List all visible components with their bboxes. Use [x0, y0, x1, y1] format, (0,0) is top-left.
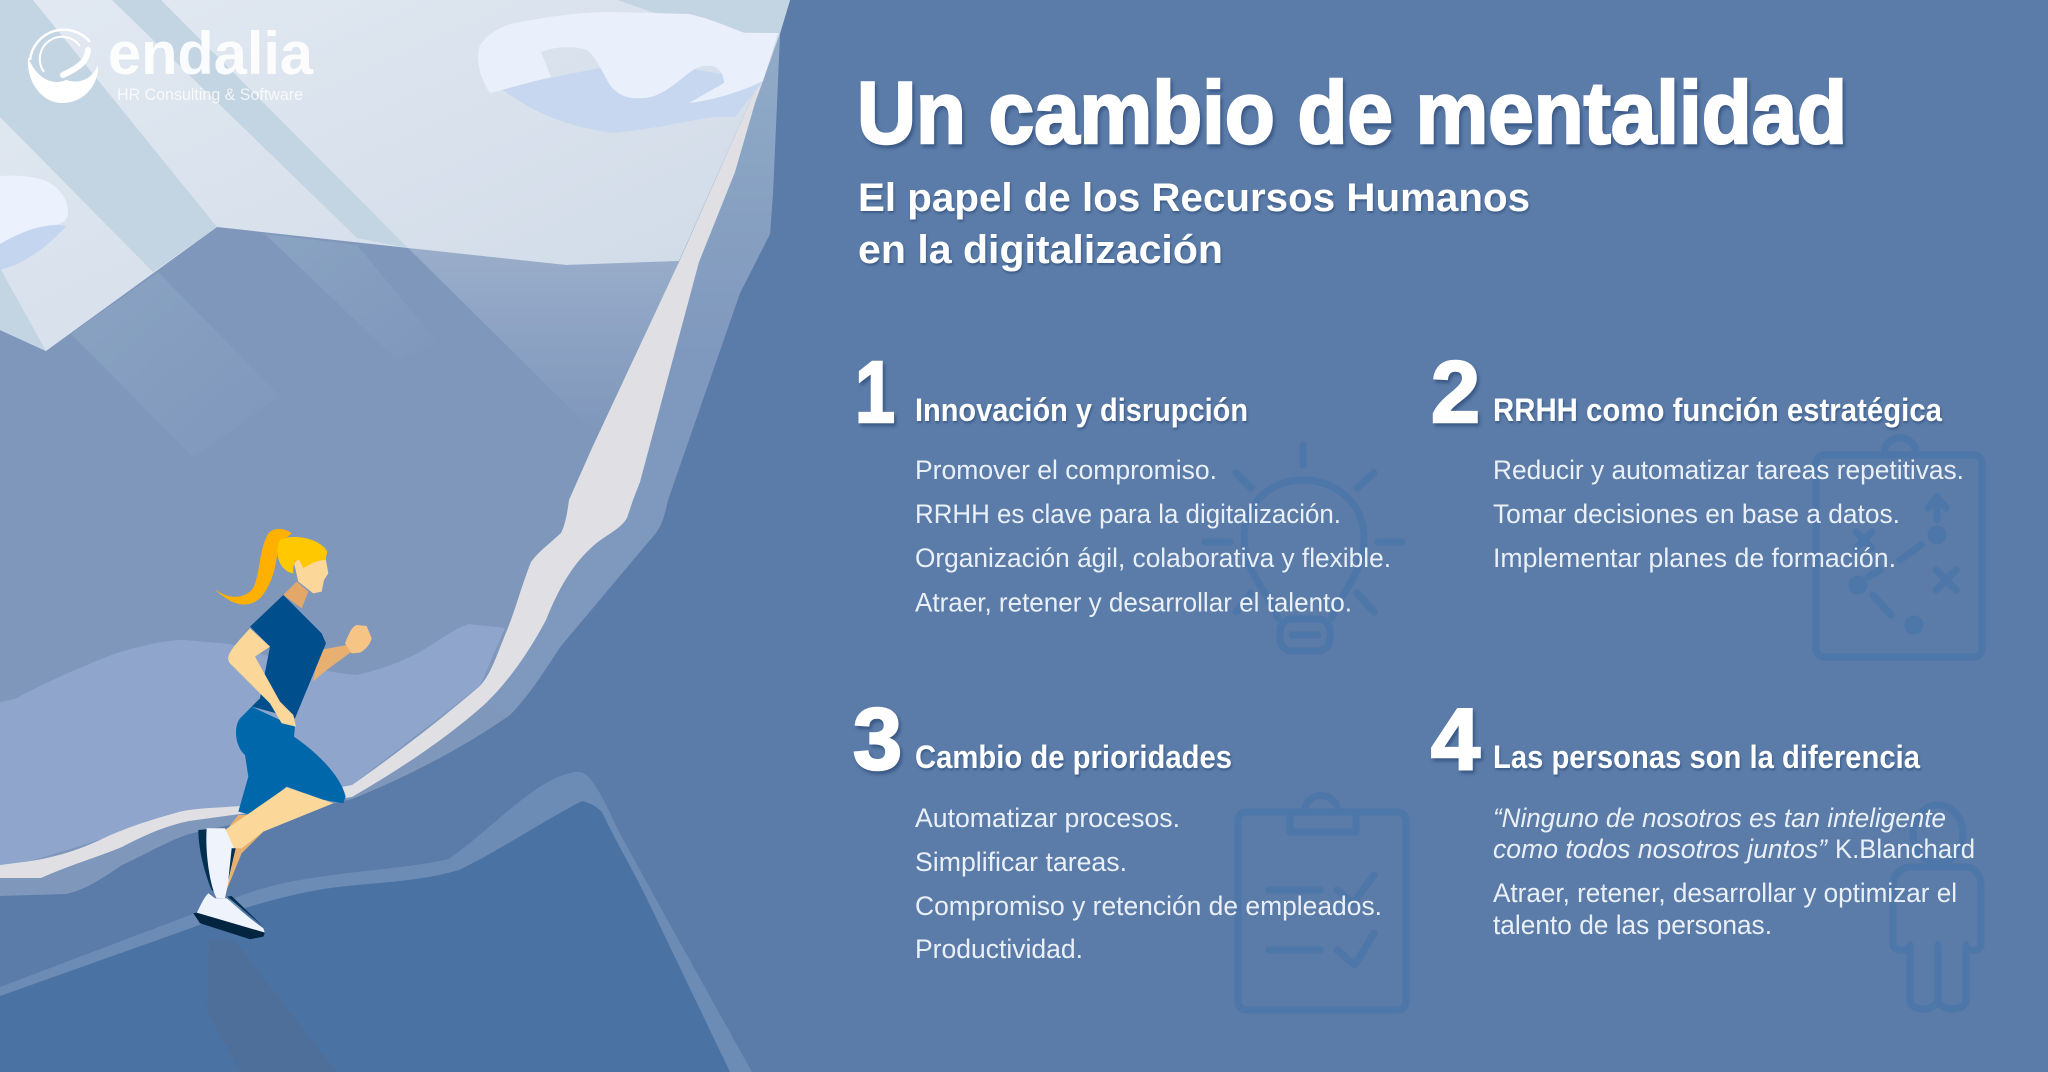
lower shoe	[193, 893, 265, 939]
number 2: 2	[1431, 344, 1480, 441]
number 1: 1	[855, 344, 895, 441]
upper shoe	[198, 828, 236, 900]
mountain side strip	[480, 0, 790, 715]
front arm	[228, 628, 296, 727]
body text 2: Implementar planes de formación.	[1493, 543, 1896, 573]
number 4: 4	[1431, 691, 1480, 788]
subtitle: El papel de los Recursos Humanos	[858, 176, 1530, 220]
body text 3: Simplificar tareas.	[915, 847, 1127, 877]
body text 2	[1493, 455, 1964, 573]
body text 1: Promover el compromiso.	[915, 455, 1217, 485]
runner figure	[193, 529, 372, 939]
sky light rays	[0, 0, 790, 351]
body text 3	[915, 803, 1382, 964]
heading 1: Innovación y disrupción	[915, 392, 1248, 428]
dark foreground hill	[0, 801, 730, 1072]
body text 4: talento de las personas.	[1493, 910, 1772, 940]
section 3: Cambio de prioridades	[853, 691, 1382, 964]
body text 2: Tomar decisiones en base a datos.	[1493, 499, 1900, 529]
heading 3: Cambio de prioridades	[915, 739, 1232, 775]
body text 4	[1493, 803, 1975, 940]
upper mountain	[0, 0, 790, 896]
body text 3: Compromiso y retención de empleados.	[915, 891, 1382, 921]
body text 3: Productividad.	[915, 934, 1083, 964]
ponytail	[215, 529, 292, 605]
runner shadow	[207, 938, 337, 1072]
title: Un cambio de mentalidad	[857, 63, 1847, 162]
body text 4: Atraer, retener, desarrollar y optimizar el	[1493, 878, 1957, 908]
neck	[283, 582, 308, 608]
body text 2: Reducir y automatizar tareas repetitivas.	[1493, 455, 1964, 485]
logo wordmark: endalia	[108, 20, 314, 87]
body text 1	[915, 455, 1391, 618]
icon: person	[1893, 805, 1981, 1009]
face	[293, 557, 328, 593]
heading 2: RRHH como función estratégica	[1493, 392, 1942, 428]
rear arm	[313, 645, 352, 682]
fist	[345, 625, 372, 653]
sky	[0, 0, 790, 351]
body text 3: Automatizar procesos.	[915, 803, 1180, 833]
section 4: Las personas son la diferencia	[1431, 691, 1975, 940]
lavender hill	[0, 624, 505, 865]
subtitle: en la digitalización	[858, 228, 1223, 272]
hair	[277, 537, 327, 573]
front thigh	[223, 787, 333, 848]
icon: light bulb	[1205, 445, 1402, 651]
body text 1: Atraer, retener y desarrollar el talento.	[915, 588, 1352, 618]
body text 1: Organización ágil, colaborativa y flexible.	[915, 543, 1391, 573]
heading 4: Las personas son la diferencia	[1493, 739, 1920, 775]
body text 4: como todos nosotros juntos”	[1493, 834, 1828, 864]
section 2: RRHH como función estratégica	[1431, 344, 1964, 573]
logo swirl icon	[28, 30, 98, 103]
icon: checklist clipboard	[1238, 796, 1406, 1010]
logo: endalia	[28, 20, 314, 104]
icon: strategy board	[1816, 438, 1982, 657]
body text 1: RRHH es clave para la digitalización.	[915, 499, 1341, 529]
cloud: top right	[478, 12, 778, 133]
body text 4: “Ninguno de nosotros es tan inteligente	[1493, 803, 1946, 833]
subtitle	[858, 176, 1530, 272]
body text 4: K.Blanchard	[1835, 834, 1975, 864]
logo tagline: HR Consulting & Software	[117, 86, 303, 104]
shirt	[250, 595, 326, 718]
cloud: left	[0, 176, 68, 270]
shorts	[236, 707, 346, 815]
number 3: 3	[853, 691, 902, 788]
illustration: mountain landscape	[0, 0, 790, 1072]
white ridge	[0, 33, 780, 878]
rear lower leg	[227, 815, 263, 890]
light rays on mountain	[71, 234, 679, 458]
section 1: Innovación y disrupción	[855, 344, 1391, 618]
lower slope shade	[0, 772, 752, 1072]
